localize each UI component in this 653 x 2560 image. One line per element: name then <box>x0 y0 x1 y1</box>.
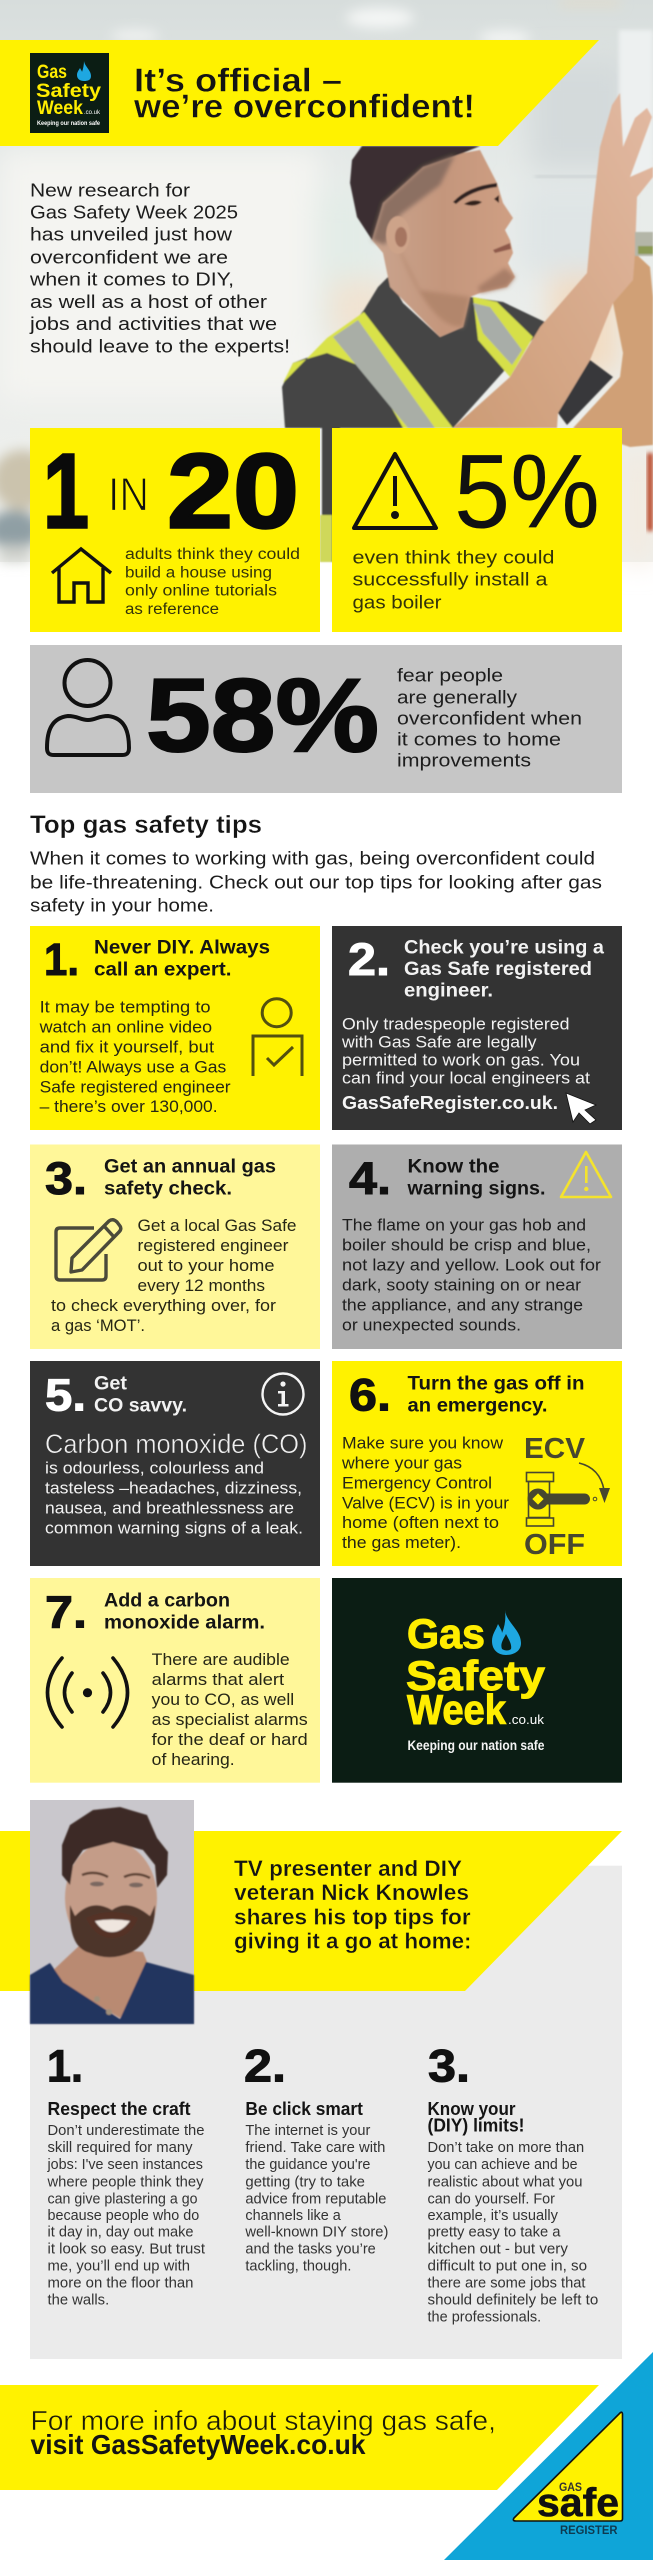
column body text <box>244 2123 388 2274</box>
column body text: can give plastering a go <box>48 2191 198 2207</box>
tip body: registered engineer <box>138 1237 289 1255</box>
second arm <box>573 253 653 447</box>
tip column 3 <box>428 2041 598 2325</box>
tip body: don’t! Always use a Gas <box>40 1058 226 1076</box>
tips intro text <box>30 847 602 916</box>
tips intro text: safety in your home. <box>30 895 214 916</box>
tip body: to check everything over, for <box>51 1297 277 1315</box>
tip column 2: 2. <box>244 2041 286 2092</box>
panel: tip 7: 7. <box>45 1587 87 1638</box>
column body text: channels like a <box>245 2208 341 2224</box>
intro text: when it comes to DIY, <box>29 269 234 290</box>
tip body: There are audible <box>152 1651 290 1669</box>
footer band <box>0 2385 599 2490</box>
icon: person <box>47 660 129 755</box>
tip body: alarms that alert <box>152 1671 285 1689</box>
tip body: The flame on your gas hob and <box>342 1217 586 1235</box>
stat caption <box>397 665 582 771</box>
arm and raised hand <box>453 93 653 428</box>
tip column 1: Respect the craft <box>48 2099 190 2119</box>
stat caption: improvements <box>397 750 531 771</box>
header logo: Gas Safety Week: Safety <box>36 81 101 102</box>
column body text: Don’t underestimate the <box>48 2123 205 2139</box>
tip body: you to CO, as well <box>152 1691 294 1709</box>
column body text: pretty easy to take a <box>428 2225 561 2241</box>
stat caption: it comes to home <box>397 729 561 750</box>
column body text: friend. Take care with <box>245 2140 385 2156</box>
tip body: out to your home <box>138 1257 274 1275</box>
tip body: tasteless –headaches, dizziness, <box>45 1479 302 1497</box>
icon: pad and pencil <box>56 1220 121 1280</box>
tip body: watch an online video <box>39 1018 212 1036</box>
tip heading: safety check. <box>104 1177 232 1199</box>
banner text: veteran Nick Knowles <box>234 1880 469 1905</box>
tip heading: Never DIY. Always <box>94 936 270 958</box>
panel: Nick Knowles tips background <box>30 1866 622 2359</box>
panel: tip 5 <box>30 1361 320 1566</box>
tip heading <box>94 936 270 981</box>
shirt and shoulder <box>282 277 547 562</box>
panel: tip 3: 3. <box>45 1153 87 1204</box>
icon: warning triangle <box>354 454 436 528</box>
tip heading: CO savvy. <box>94 1395 187 1417</box>
tip body: or unexpected sounds. <box>342 1317 521 1335</box>
tip heading: warning signs. <box>406 1177 546 1199</box>
tip body: every 12 months <box>138 1277 265 1295</box>
tip heading: engineer. <box>404 980 493 1002</box>
icon: emergency control valve: OFF <box>524 1529 585 1561</box>
corner: Gas Safe Register logo: GAS <box>559 2480 582 2494</box>
tip heading <box>404 936 604 1002</box>
tip body <box>51 1217 296 1335</box>
tip body: Emergency Control <box>342 1474 492 1492</box>
column body text <box>46 2123 205 2308</box>
header logo: Gas Safety Week: .co.uk <box>84 110 101 116</box>
intro text: Gas Safety Week 2025 <box>30 202 238 223</box>
column body text: you can achieve and be <box>428 2157 578 2173</box>
panel: Gas Safety Week logo: .co.uk <box>508 1712 545 1727</box>
panel: 1 in 20 stat: IN <box>108 468 149 520</box>
header logo: Gas Safety Week <box>30 53 109 133</box>
panel: 1 in 20 stat: 1 <box>43 432 89 550</box>
column body text: because people who do <box>48 2208 199 2224</box>
panel: tip 4: 4. <box>349 1153 391 1204</box>
column body text: more on the floor than <box>48 2275 194 2291</box>
tip body: home (often next to <box>342 1514 499 1532</box>
icon: blue flame <box>492 1610 521 1655</box>
stat caption: overconfident when <box>397 707 582 728</box>
tip body <box>341 1434 510 1552</box>
footer band: For more info about staying gas safe, <box>30 2405 496 2436</box>
panel: tip 3 <box>30 1144 320 1349</box>
tip body: common warning signs of a leak. <box>45 1519 303 1537</box>
panel: 58% stat <box>30 645 622 793</box>
panel: tip 2 <box>332 926 622 1130</box>
stat caption: fear people <box>397 665 503 686</box>
title: It’s official – <box>134 62 342 99</box>
tip heading: Check you’re using a <box>404 936 604 958</box>
tip body: and fix it yourself, but <box>40 1038 215 1056</box>
stat caption: successfully install a <box>352 569 548 590</box>
header logo: Gas Safety Week: Keeping our nation safe <box>37 120 100 127</box>
tip body: – there’s over 130,000. <box>40 1098 218 1116</box>
column body text: the guidance you're <box>245 2157 370 2173</box>
tip column 1 <box>46 2041 205 2308</box>
tip body: the gas meter). <box>342 1534 461 1552</box>
tip body: with Gas Safe are legally <box>341 1033 537 1051</box>
tip body: is odourless, colourless and <box>45 1459 264 1477</box>
panel: Gas Safety Week logo: Gas <box>407 1610 485 1657</box>
panel: tip 7 <box>30 1578 320 1783</box>
column body text: advice from reputable <box>245 2191 386 2207</box>
tip body: of hearing. <box>152 1751 235 1769</box>
tips intro text: When it comes to working with gas, being overconfident could <box>30 847 595 868</box>
column body text: example, it’s usually <box>428 2208 559 2224</box>
tip body <box>152 1651 308 1769</box>
tip body: Make sure you know <box>342 1434 503 1452</box>
stat caption: gas boiler <box>352 591 442 612</box>
hi-vis vest <box>283 312 453 428</box>
icon: information <box>262 1374 304 1414</box>
tip heading: Know the <box>408 1156 500 1178</box>
tip heading: call an expert. <box>94 959 232 981</box>
panel: tip 1 <box>30 926 320 1130</box>
tip column 2: Be click smart <box>245 2099 363 2119</box>
tip body: the appliance, and any strange <box>342 1297 583 1315</box>
corner: Gas Safe Register logo: REGISTER <box>560 2525 618 2537</box>
column body text: can do yourself. For <box>428 2191 555 2207</box>
header logo: Gas Safety Week: Week <box>37 98 83 119</box>
stat caption: are generally <box>397 686 518 707</box>
intro text: overconfident we are <box>30 246 228 267</box>
icon: emergency control valve <box>524 1433 610 1561</box>
panel: tip 6 <box>332 1361 622 1566</box>
tip body: not lazy and yellow. Look out for <box>342 1257 602 1275</box>
tip body: dark, sooty staining on or near <box>342 1277 582 1295</box>
tip body: for the deaf or hard <box>152 1731 308 1749</box>
tip body: as specialist alarms <box>152 1711 308 1729</box>
intro text: has unveiled just how <box>30 224 233 245</box>
column body text: it look so easy. But trust <box>48 2242 205 2258</box>
tip body: permitted to work on gas. You <box>342 1052 580 1070</box>
tip column 1: 1. <box>47 2041 83 2092</box>
stat caption: even think they could <box>352 546 554 567</box>
column body text: getting (try to take <box>245 2175 365 2191</box>
intro text: New research for <box>30 180 190 201</box>
stat caption <box>125 546 300 618</box>
column body text: me, you’ll end up with <box>48 2258 190 2274</box>
tip body <box>342 1217 602 1335</box>
tip body: Valve (ECV) is in your <box>342 1494 510 1512</box>
stat caption: as reference <box>125 601 219 618</box>
column body text: and the tasks you’re <box>245 2242 376 2258</box>
tip heading: an emergency. <box>408 1395 548 1417</box>
corner: Gas Safe Register logo <box>444 2352 653 2560</box>
panel: 1 in 20 stat <box>30 428 320 632</box>
icon: yellow warning triangle <box>561 1152 611 1197</box>
column body text: there are some jobs that <box>428 2275 586 2291</box>
panel: tip 6: 6. <box>349 1370 391 1421</box>
corner: Gas Safe Register logo: safe <box>537 2481 619 2525</box>
column body text <box>428 2140 598 2325</box>
intro text: should leave to the experts! <box>30 335 290 356</box>
header logo: Gas Safety Week: Gas <box>37 62 67 83</box>
intro text: as well as a host of other <box>30 291 267 312</box>
tip heading: monoxide alarm. <box>104 1611 265 1633</box>
tip body: Carbon monoxide (CO) <box>45 1429 308 1459</box>
photo: Nick Knowles <box>30 1800 194 2024</box>
tip body: boiler should be crisp and blue, <box>342 1237 591 1255</box>
icon: person with tick <box>253 999 302 1076</box>
tip body: where your gas <box>341 1454 462 1472</box>
tip heading: Turn the gas off in <box>408 1372 584 1394</box>
tip heading <box>406 1156 546 1199</box>
tip body: nausea, and breathlessness are <box>45 1500 294 1518</box>
tip column 3: Know your <box>428 2099 516 2119</box>
title <box>133 62 475 124</box>
tip column 3: 3. <box>428 2041 470 2092</box>
tip body: a gas ‘MOT’. <box>51 1317 145 1335</box>
tips intro text: be life-threatening. Check out our top tips for looking after gas <box>30 871 602 892</box>
tip body: Only tradespeople registered <box>342 1015 570 1033</box>
tip heading <box>408 1372 584 1417</box>
banner: Nick Knowles intro <box>0 1831 622 1991</box>
tip heading <box>104 1156 276 1199</box>
stat caption: adults think they could <box>125 546 300 563</box>
icon: mouse cursor <box>566 1093 596 1124</box>
intro text <box>29 180 290 356</box>
panel: 5% stat <box>332 428 622 632</box>
panel: tip 1: 1. <box>44 934 79 985</box>
column body text: realistic about what you <box>428 2175 582 2191</box>
tip body <box>39 999 231 1116</box>
column body text: the walls. <box>48 2292 109 2308</box>
hero photo: engineer installing an alarm <box>0 0 653 562</box>
tip body: can find your local engineers at <box>342 1070 590 1088</box>
banner text: giving it a go at home: <box>234 1928 472 1953</box>
panel: Gas Safety Week logo: Week <box>407 1686 507 1733</box>
heading: top gas safety tips: Top gas safety tips <box>30 811 262 839</box>
icon: house <box>52 549 111 602</box>
column body text: skill required for many <box>48 2140 193 2156</box>
tip body: It may be tempting to <box>40 999 211 1017</box>
column body text: well-known DIY store) <box>244 2225 388 2241</box>
title: we’re overconfident! <box>133 87 475 124</box>
panel: 58% stat: 58% <box>146 658 379 774</box>
head <box>372 150 515 337</box>
panel: 5% stat: 5% <box>454 434 600 550</box>
tip body <box>45 1429 308 1537</box>
tip body: GasSafeRegister.co.uk. <box>342 1093 558 1113</box>
column body text: tackling, though. <box>245 2258 351 2274</box>
panel: 1 in 20 stat: 20 <box>167 432 299 550</box>
banner text: TV presenter and DIY <box>234 1856 462 1881</box>
tip heading: Get <box>94 1372 128 1394</box>
stat caption: only online tutorials <box>125 583 277 600</box>
intro text: jobs and activities that we <box>29 313 277 334</box>
tip heading: Add a carbon <box>104 1590 230 1612</box>
column body text: kitchen out - but very <box>428 2242 569 2258</box>
icon: alarm signal <box>48 1658 128 1727</box>
panel: Gas Safety Week logo: Keeping our nation safe <box>408 1738 545 1753</box>
panel: Gas Safety Week logo: Safety <box>406 1652 546 1699</box>
column body text: jobs: I've seen instances <box>46 2157 203 2173</box>
header band <box>0 40 599 146</box>
tip body: Safe registered engineer <box>40 1078 231 1096</box>
tip heading <box>104 1590 265 1633</box>
stat caption <box>352 546 554 612</box>
tip body <box>341 1015 590 1113</box>
column body text: Don’t take on more than <box>428 2140 584 2156</box>
stat caption: build a house using <box>125 564 272 581</box>
footer band: visit GasSafetyWeek.co.uk <box>30 2429 366 2460</box>
tip column 2 <box>244 2041 388 2274</box>
banner text: shares his top tips for <box>234 1904 471 1929</box>
column body text: The internet is your <box>245 2123 371 2139</box>
tip heading: Get an annual gas <box>104 1156 276 1178</box>
panel: tip 2: 2. <box>348 934 390 985</box>
column body text: where people think they <box>46 2175 204 2191</box>
panel: Gas Safety Week logo <box>332 1578 622 1783</box>
tip heading <box>94 1372 187 1417</box>
icon: emergency control valve: ECV <box>524 1433 586 1465</box>
tip column 3: (DIY) limits! <box>428 2116 524 2136</box>
column body text: the professionals. <box>428 2309 541 2325</box>
banner text <box>234 1856 472 1953</box>
column body text: should definitely be left to <box>428 2292 598 2308</box>
panel: tip 5: 5. <box>45 1370 86 1421</box>
panel: tip 4 <box>332 1144 622 1349</box>
tip body: Get a local Gas Safe <box>138 1217 296 1235</box>
column body text: it day in, day out make <box>48 2225 194 2241</box>
column body text: difficult to put one in, so <box>428 2258 587 2274</box>
tip heading: Gas Safe registered <box>404 958 592 980</box>
